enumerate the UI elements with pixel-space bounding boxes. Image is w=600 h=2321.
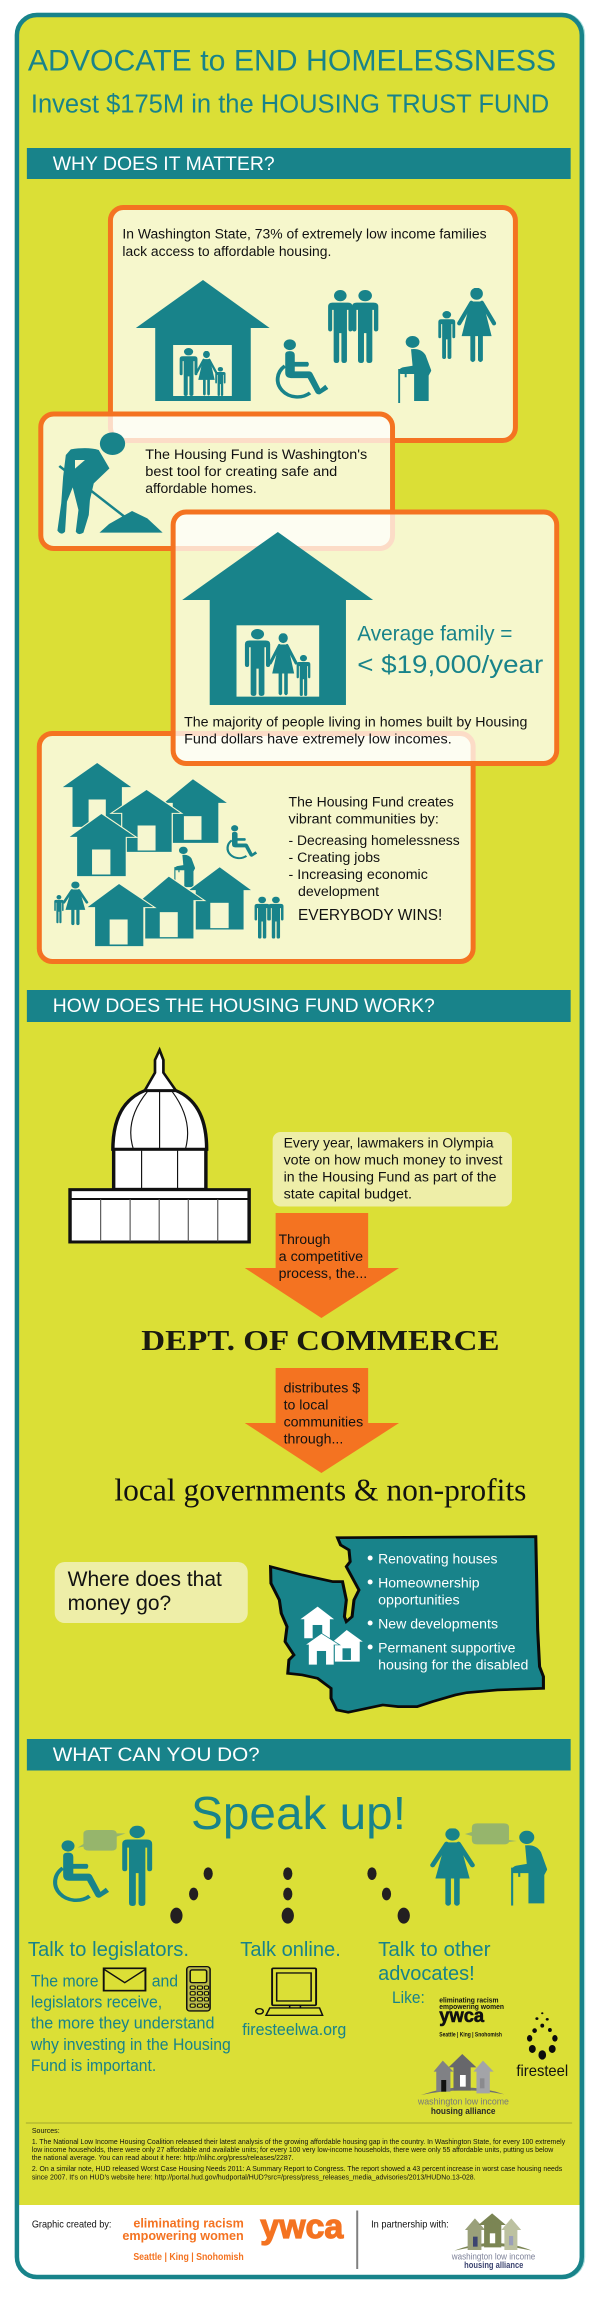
icon: house with family [136, 280, 270, 401]
illustration: people talking, left [55, 1826, 152, 1906]
icon: two men [328, 290, 378, 363]
icon: computer [256, 1968, 323, 2015]
arrow: competitive process [245, 1213, 399, 1318]
arrow: competitive process: Through [279, 1231, 330, 1247]
text: community benefits: - Decreasing homelessness [289, 832, 460, 848]
sources: 1. The National Low Income Housing Coalition released their latest analysis of the growing affordable housing gap in the country. In Washington State, for every 100 extremely [32, 2139, 566, 2146]
sources: 2. On a similar note, HUD released Worst Case Housing Needs 2011: A Summary Report to Congress. The report showed a 43 percent increase in worst case housing needs [32, 2166, 563, 2173]
text: talk to legislators: the more they understand [31, 2013, 214, 2033]
logo: firesteel [516, 2012, 568, 2080]
text: majority of residents: The majority of people living in homes built by Housing [184, 713, 527, 730]
text: best tool: affordable homes. [145, 480, 257, 496]
logo: washington low income housing alliance, gray [417, 2054, 509, 2116]
icon: large house with family [182, 532, 373, 705]
arrow: competitive process: a competitive [279, 1248, 363, 1264]
callout: lawmakers vote: vote on how much money to invest [284, 1151, 503, 1168]
text: average family income: < $19,000/year [357, 651, 543, 679]
footer: graphic created by: Graphic created by: [32, 2219, 111, 2231]
logo: ywca orange: eliminating racism [133, 2215, 244, 2231]
text: community benefits: development [298, 883, 379, 899]
sources: low income households, there were only 27 affordable and available units; for every 100 very low-income households, there were only 55 affordable units, putting us below [32, 2147, 553, 2154]
logo: ywca small [439, 1995, 504, 2039]
arrow: distributes money [245, 1368, 399, 1473]
text: talk to legislators [30, 1971, 231, 2075]
text: majority of residents: Fund dollars have extremely low incomes. [184, 730, 452, 747]
icon: wheelchair user [278, 339, 328, 397]
logo: ywca small: ywca [439, 2006, 485, 2027]
text: community benefits: The Housing Fund creates [289, 793, 454, 810]
text: talk to legislators: why investing in the Housing [30, 2035, 231, 2054]
logo: ywca orange [122, 2208, 344, 2263]
column: talk to other advocates [378, 1939, 491, 2007]
text: talk to legislators: and [152, 1971, 178, 1991]
sources: the national average. You can read about it here: http://nlihc.org/press/releases/2287. [32, 2155, 294, 2162]
panel: affordable housing access [110, 208, 515, 440]
callout: lawmakers vote: in the Housing Fund as part of the [284, 1168, 497, 1185]
sources: since 2007. It's on HUD's website here: http://portal.hud.gov/hudportal/HUD?src=/press/press_releases_media_advisories/2013/HUDNo.13-028. [32, 2174, 476, 2182]
icon: phone [187, 1967, 210, 2011]
section banner: what can you do: WHAT CAN YOU DO? [53, 1745, 260, 1766]
illustration: dotted lines [170, 1867, 410, 1924]
label: like: Like: [392, 1988, 425, 2007]
panel: vibrant communities [39, 734, 473, 962]
illustration: neighbourhood of houses and people [54, 762, 283, 947]
map: Washington state [271, 1537, 543, 1712]
callout: where does that money go [55, 1562, 248, 1623]
logo: washington low income housing alliance, colour: washington low income [451, 2251, 535, 2262]
section banner: why does it matter [27, 148, 571, 179]
list: where money goes [368, 1550, 528, 1673]
section banner: how does the fund work [27, 990, 571, 1022]
text: community benefits: vibrant communities by: [289, 810, 439, 827]
illustration: people talking, right [433, 1823, 547, 1906]
logo: ywca small: eliminating racism [439, 1995, 499, 2005]
arrow: distributes money: distributes $ [284, 1379, 360, 1396]
callout: where does that money go: money go? [68, 1592, 171, 1615]
text: 73 percent: lack access to affordable housing. [122, 243, 331, 259]
subtitle: Invest $175M in the HOUSING TRUST FUND [31, 90, 549, 119]
text: best tool: best tool for creating safe and [145, 463, 337, 479]
section banner: how does the fund work: HOW DOES THE HOUSING FUND WORK? [53, 996, 435, 1017]
text: best tool [145, 446, 367, 496]
heading: talk online: Talk online. [240, 1939, 341, 1961]
text: average family income: Average family = [357, 622, 512, 646]
heading: talk to other advocates [378, 1939, 491, 1985]
footer divider [356, 2210, 358, 2269]
icon: elderly person with cane [399, 336, 431, 403]
list: where money goes: New developments [378, 1615, 498, 1632]
text: community benefits [289, 793, 460, 924]
section banner: why does it matter: WHY DOES IT MATTER? [53, 154, 275, 175]
text: 73 percent: In Washington State, 73% of extremely low income families [122, 225, 487, 242]
title: ADVOCATE to END HOMELESSNESS [28, 44, 556, 78]
column: talk online [240, 1939, 346, 2039]
text: best tool: The Housing Fund is Washington's [145, 446, 367, 462]
list: where money goes: Permanent supportive [378, 1639, 516, 1656]
heading: talk to legislators: Talk to legislators. [28, 1939, 189, 1961]
panel: average family income [173, 512, 557, 764]
text: community benefits: - Creating jobs [289, 849, 380, 865]
callout: lawmakers vote: Every year, lawmakers in Olympia [284, 1134, 494, 1151]
arrow: competitive process: process, the... [279, 1265, 367, 1281]
logo: firesteel: firesteel [516, 2063, 568, 2080]
icon: mother and child [438, 288, 494, 362]
footer: in partnership with [371, 2213, 535, 2270]
logo: washington low income housing alliance, colour [451, 2213, 535, 2270]
logo: washington low income housing alliance, gray: housing alliance [431, 2106, 496, 2116]
panel: best tool [41, 414, 393, 548]
icon: capitol building [70, 1050, 249, 1242]
logo: washington low income housing alliance, colour: housing alliance [464, 2260, 523, 2270]
heading: department of commerce: DEPT. OF COMMERCE [141, 1326, 500, 1357]
logo: ywca orange: ywca [260, 2208, 344, 2246]
logo: ywca orange: Seattle | King | Snohomish [133, 2252, 244, 2263]
footer: graphic created by [32, 2208, 344, 2263]
text: majority of residents [184, 713, 527, 747]
list: where money goes: housing for the disabled [378, 1656, 528, 1673]
arrow: distributes money: communities [284, 1413, 363, 1430]
heading: local governments and non-profits: local governments & non-profits [114, 1472, 526, 1508]
icon: white houses [300, 1607, 363, 1665]
heading: speak up: Speak up! [191, 1787, 406, 1839]
text: average family income [357, 622, 543, 679]
text: talk to legislators: legislators receive, [31, 1992, 162, 2012]
icon: envelope [104, 1968, 145, 1991]
arrow: distributes money: to local [284, 1396, 328, 1413]
section banner: what can you do [27, 1739, 571, 1770]
icon: worker with shovel [57, 432, 163, 534]
heading: talk to other advocates: advocates! [378, 1963, 475, 1985]
column: talk to legislators [28, 1939, 231, 2075]
logo: ywca small: empowering women [439, 2002, 504, 2011]
heading: talk to other advocates: Talk to other [378, 1939, 491, 1961]
text: community benefits: - Increasing economic [289, 866, 428, 882]
sources [26, 2122, 572, 2182]
list: where money goes: Homeownership [378, 1574, 480, 1591]
list: where money goes: opportunities [378, 1591, 460, 1608]
arrow: distributes money: through... [284, 1430, 343, 1447]
text: talk to legislators: The more [31, 1971, 99, 1991]
sources: Sources: [32, 2128, 60, 2135]
list: where money goes: Renovating houses [378, 1550, 498, 1567]
text: 73 percent [122, 225, 487, 259]
callout: lawmakers vote [273, 1132, 512, 1206]
link: firesteelwa.org: firesteelwa.org [242, 2020, 346, 2039]
logo: washington low income housing alliance, gray: washington low income [417, 2096, 509, 2107]
footer: in partnership with: In partnership with: [371, 2219, 449, 2231]
logo: ywca small: Seattle | King | Snohomish [439, 2031, 502, 2039]
callout: lawmakers vote: state capital budget. [284, 1185, 412, 1202]
text: community benefits: EVERYBODY WINS! [298, 907, 442, 924]
text: talk to legislators: Fund is important. [31, 2056, 156, 2075]
logo: ywca orange: empowering women [122, 2228, 244, 2243]
callout: where does that money go: Where does that [68, 1568, 222, 1591]
